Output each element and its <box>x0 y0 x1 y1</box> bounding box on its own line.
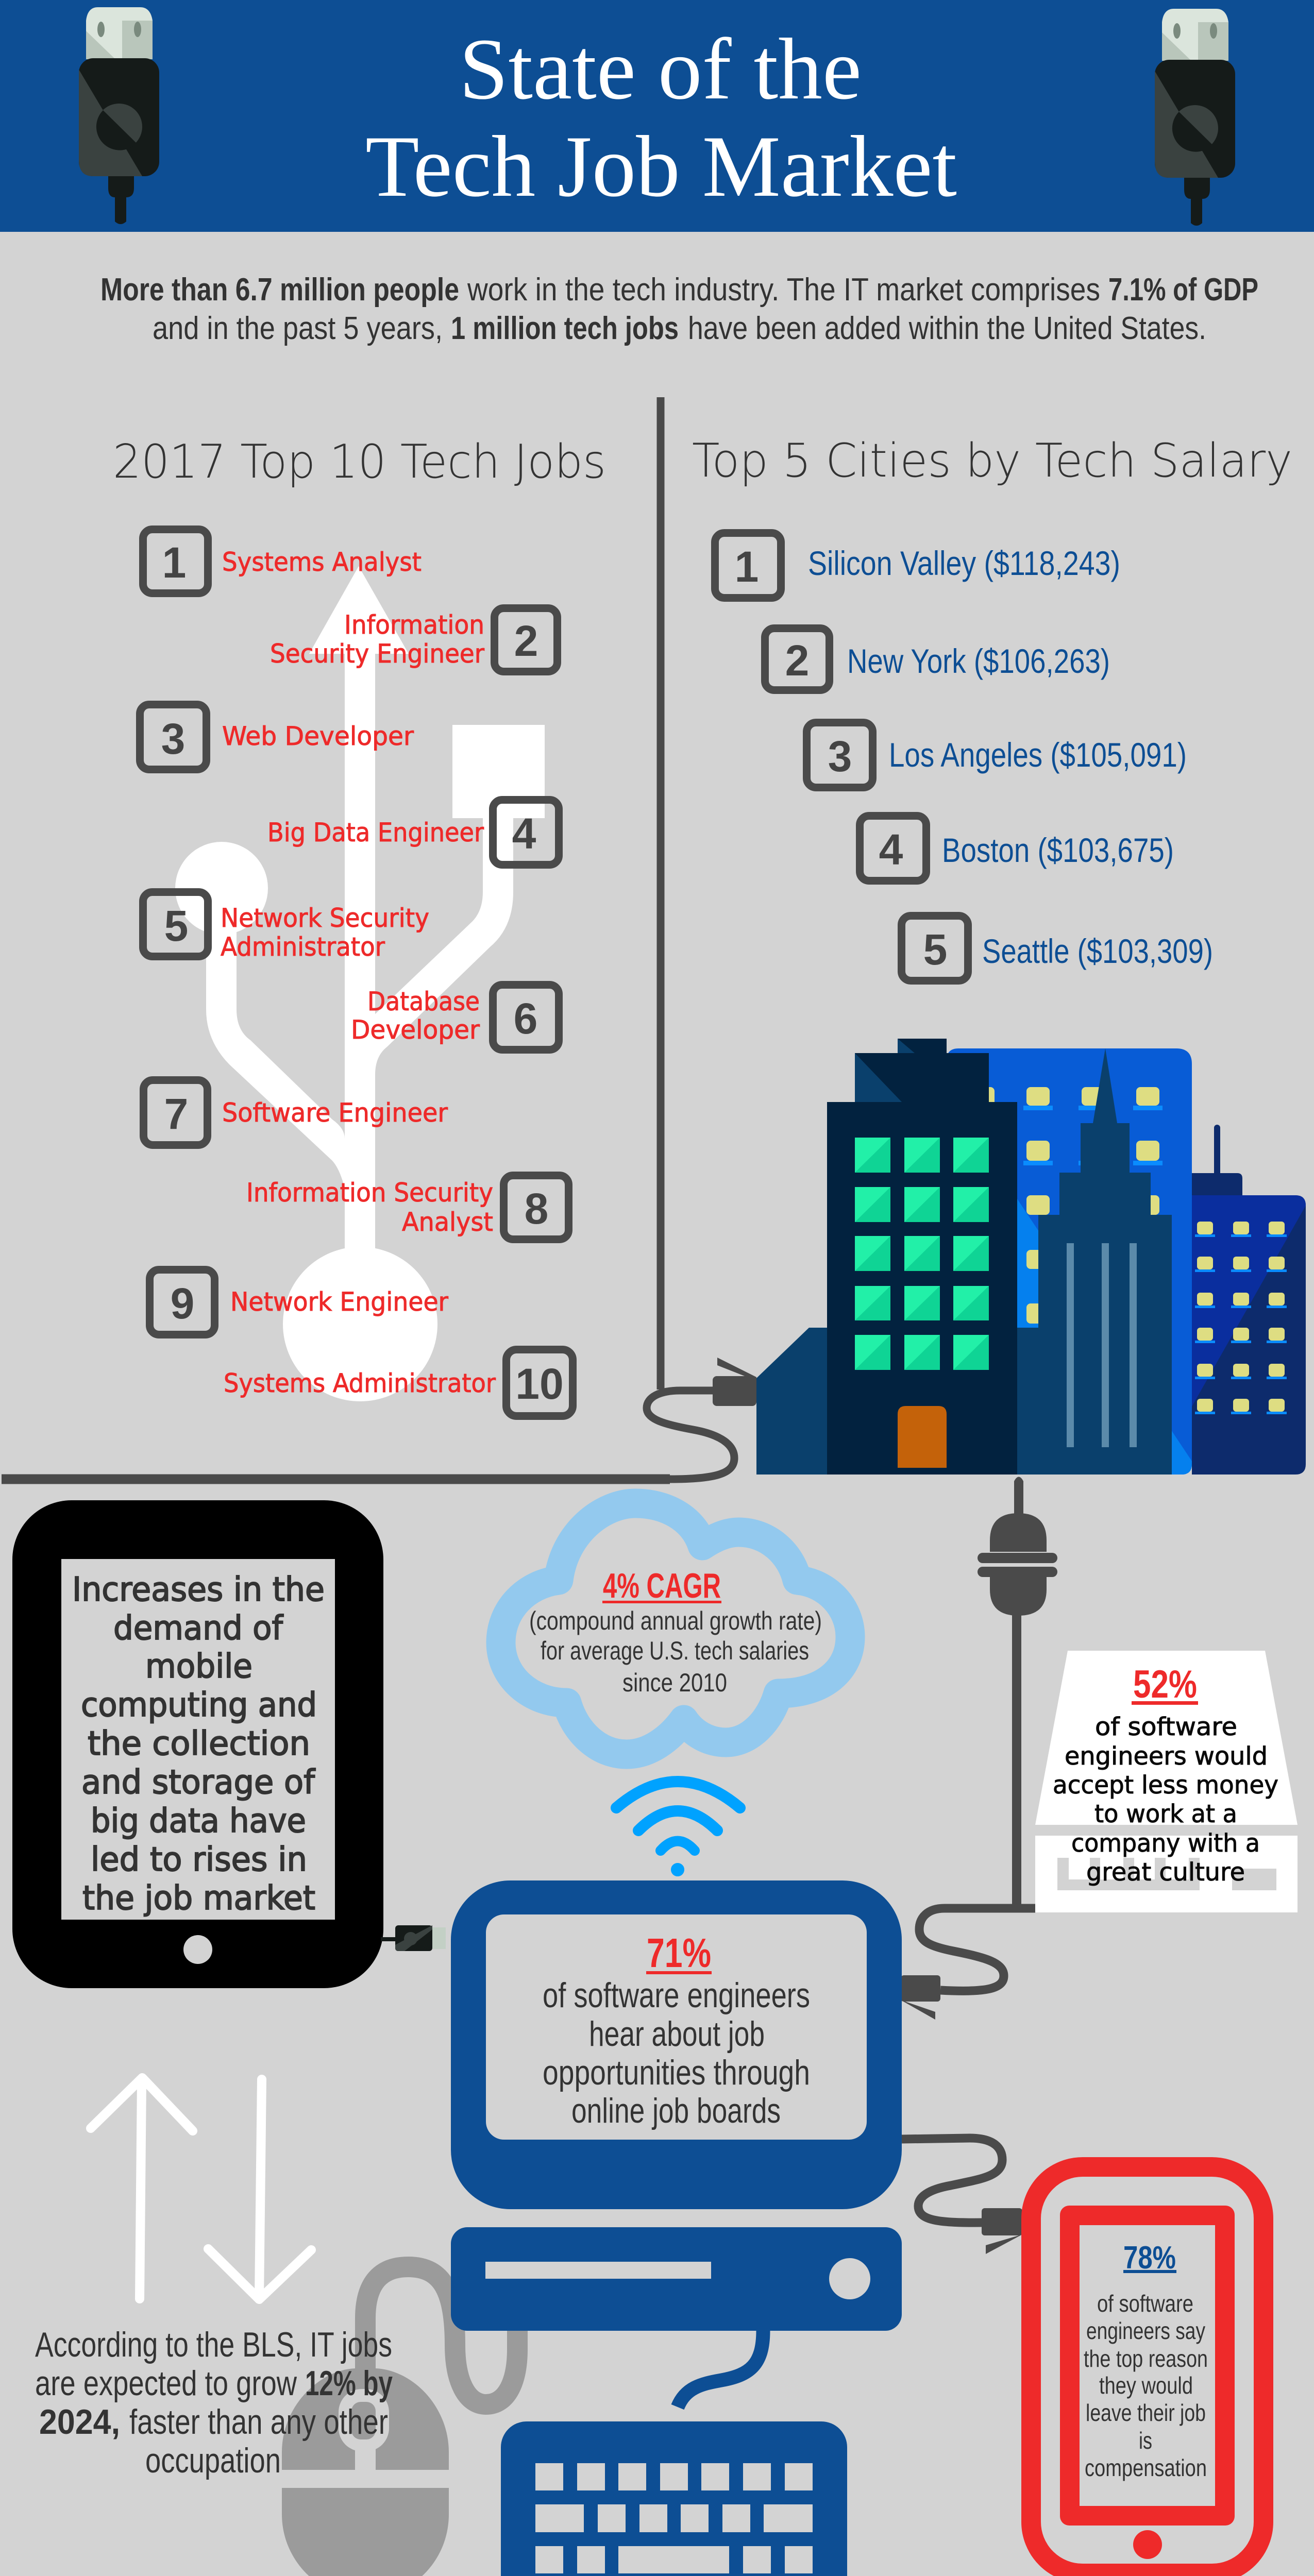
heading: top 10 jobs: 2017 Top 10 Tech Jobs <box>113 435 606 489</box>
job 6: 6 <box>514 994 537 1043</box>
heading: top 5 cities: Top 5 Cities by Tech Salary <box>692 434 1292 488</box>
low wing and front tower <box>756 1048 1172 1475</box>
job 10 <box>224 1350 573 1416</box>
icon: plug into phone <box>982 2208 1022 2254</box>
tablet text: Increases in the <box>72 1571 325 1609</box>
panel: 52% house <box>1035 1651 1298 1912</box>
icon: wifi <box>616 1782 740 1874</box>
job 10: Systems Administrator <box>224 1368 496 1398</box>
job 6 <box>351 985 559 1050</box>
job 2: 2 <box>514 617 538 665</box>
phone text: leave their job <box>1086 2399 1206 2426</box>
tablet text: big data have <box>91 1802 306 1840</box>
intro text: 1 million tech jobs <box>451 311 679 346</box>
connector cable: plug to monitor <box>919 1908 1035 1991</box>
city 2: New York ($106,263) <box>847 642 1110 680</box>
blue building <box>947 1048 1192 1475</box>
city 1: 1 <box>735 543 759 591</box>
intro text: have been added within the United States. <box>688 311 1206 346</box>
job 2: Information <box>344 610 484 640</box>
city 1: Silicon Valley ($118,243) <box>808 544 1120 582</box>
panel: red phone <box>1031 2167 1264 2573</box>
city 2 <box>765 629 1110 690</box>
intro text: and in the past 5 years, <box>153 311 443 346</box>
cloud text <box>529 1606 822 1697</box>
job 8: Information Security <box>246 1178 493 1208</box>
monitor text: online job boards <box>571 2091 781 2130</box>
intro text: work in the tech industry. The IT market comprises <box>467 272 1100 308</box>
icon: keyboard cable <box>678 2331 763 2407</box>
city 5 <box>902 916 1213 981</box>
phone text: they would <box>1099 2372 1193 2399</box>
job 6: Database <box>367 987 480 1016</box>
stat 78%: 78% <box>1123 2240 1176 2276</box>
job 2: Security Engineer <box>270 639 484 669</box>
tablet text: mobile <box>145 1648 252 1686</box>
job 5: Network Security <box>221 903 429 933</box>
intro text: More than 6.7 million people <box>100 272 459 308</box>
title: Tech Job Market <box>365 118 957 215</box>
header band <box>0 0 1314 232</box>
monitor text: hear about job <box>589 2014 765 2054</box>
job 1: 1 <box>162 538 186 587</box>
icon: plug into monitor <box>901 1975 940 2020</box>
text: BLS projection: According to the BLS, IT jobs <box>35 2325 392 2364</box>
icon: keyboard <box>501 2421 847 2576</box>
phone text <box>1084 2290 1208 2481</box>
icon: down arrow <box>208 2079 311 2299</box>
panel: computer monitor <box>451 1880 902 2209</box>
city 4: Boston ($103,675) <box>942 831 1174 869</box>
stat text: accept less money <box>1053 1771 1278 1800</box>
icon: up arrow <box>91 2078 193 2299</box>
city 1 <box>715 533 1120 598</box>
icon: mouse <box>282 2368 449 2576</box>
stat text: of software <box>1095 1713 1237 1741</box>
stat 71%: 71% <box>647 1930 711 1976</box>
city 4: 4 <box>879 825 903 874</box>
city 3: 3 <box>828 732 852 781</box>
job 1: Systems Analyst <box>222 547 422 577</box>
title: State of the <box>459 21 862 117</box>
phone text: of software <box>1097 2290 1193 2317</box>
job 3: Web Developer <box>222 721 414 751</box>
job 3 <box>140 705 414 770</box>
tablet text: led to rises in <box>91 1841 307 1879</box>
job 8: 8 <box>525 1184 548 1233</box>
list: top 5 cities <box>715 533 1213 981</box>
job 9: Network Engineer <box>230 1287 448 1317</box>
job 7: Software Engineer <box>222 1098 448 1128</box>
phone text: the top reason <box>1084 2345 1208 2372</box>
phone text: engineers say <box>1086 2317 1205 2344</box>
job 9: 9 <box>171 1279 194 1328</box>
job 2 <box>270 608 558 672</box>
stat text: great culture <box>1086 1858 1245 1887</box>
tablet text <box>72 1571 325 1918</box>
monitor text: of software engineers <box>543 1976 810 2015</box>
stat text: company with a <box>1071 1829 1260 1858</box>
job 8: Analyst <box>402 1207 493 1237</box>
panel: cloud <box>501 1503 850 1754</box>
job 5: 5 <box>164 902 188 950</box>
icon: mouse cable <box>365 2267 517 2404</box>
cloud text: since 2010 <box>622 1668 727 1697</box>
tablet text: the collection <box>88 1725 310 1763</box>
text: BLS projection: 2024, <box>39 2402 120 2442</box>
stat 52%: 52% <box>1133 1663 1197 1706</box>
stat 4% CAGR: 4% CAGR <box>603 1566 721 1605</box>
phone text: is <box>1139 2427 1152 2454</box>
job 7 <box>143 1080 448 1145</box>
connector cable: monitor to phone <box>902 2138 1002 2223</box>
city 5: Seattle ($103,309) <box>982 932 1213 970</box>
job 8 <box>246 1176 569 1240</box>
main dark building <box>827 1039 1017 1475</box>
monitor text <box>543 1976 810 2130</box>
text: BLS projection: faster than any other <box>129 2402 388 2442</box>
job 3: 3 <box>161 715 185 763</box>
illustration: city skyline <box>756 1039 1306 1475</box>
stat text: engineers would <box>1065 1742 1268 1771</box>
title <box>365 21 957 215</box>
icon: white usb symbol <box>175 566 545 1401</box>
text: BLS projection: are expected to grow <box>35 2364 297 2403</box>
intro text <box>100 272 1258 346</box>
job 4 <box>267 800 559 865</box>
job 10: 10 <box>515 1360 564 1408</box>
city 2: 2 <box>785 636 809 685</box>
cloud text: (compound annual growth rate) <box>529 1606 822 1635</box>
cloud text: for average U.S. tech salaries <box>541 1636 809 1665</box>
monitor text: opportunities through <box>543 2053 810 2092</box>
connector cable: divider and S-curve to city <box>2 397 734 1479</box>
text: BLS projection: 12% by <box>305 2364 393 2403</box>
intro text: 7.1% of GDP <box>1108 272 1258 308</box>
city 3: Los Angeles ($105,091) <box>889 736 1187 774</box>
city 4 <box>860 816 1174 881</box>
job 9 <box>149 1269 448 1334</box>
job 1 <box>143 530 422 594</box>
tablet text: and storage of <box>81 1764 315 1802</box>
job 5 <box>143 892 429 962</box>
job 6: Developer <box>351 1015 480 1045</box>
job 4: Big Data Engineer <box>267 818 484 848</box>
icon: cable plug at city <box>713 1358 756 1406</box>
list: top 10 tech jobs <box>140 530 573 1416</box>
tower window stripes <box>1067 1243 1137 1447</box>
far right building <box>1192 1125 1306 1475</box>
stat text <box>1053 1713 1278 1887</box>
stat text: to work at a <box>1094 1800 1237 1828</box>
job 4: 4 <box>512 809 536 858</box>
icon: right usb plug <box>1155 9 1235 226</box>
tablet text: demand of <box>113 1609 283 1648</box>
panel: black tablet <box>12 1500 383 1988</box>
icon: power plug and cable <box>978 1477 1057 1908</box>
city 3 <box>807 722 1187 787</box>
job 7: 7 <box>164 1090 188 1138</box>
city 5: 5 <box>923 925 947 974</box>
text: BLS projection: occupation <box>145 2441 281 2480</box>
icon: left usb plug <box>79 7 159 224</box>
job 5: Administrator <box>221 932 385 962</box>
tablet text: the job market <box>82 1879 315 1918</box>
phone text: compensation <box>1085 2454 1207 2481</box>
text: BLS projection <box>35 2325 393 2480</box>
icon: computer base <box>451 2227 902 2331</box>
icon: small usb plug <box>381 1925 446 1951</box>
tablet text: computing and <box>81 1686 317 1724</box>
